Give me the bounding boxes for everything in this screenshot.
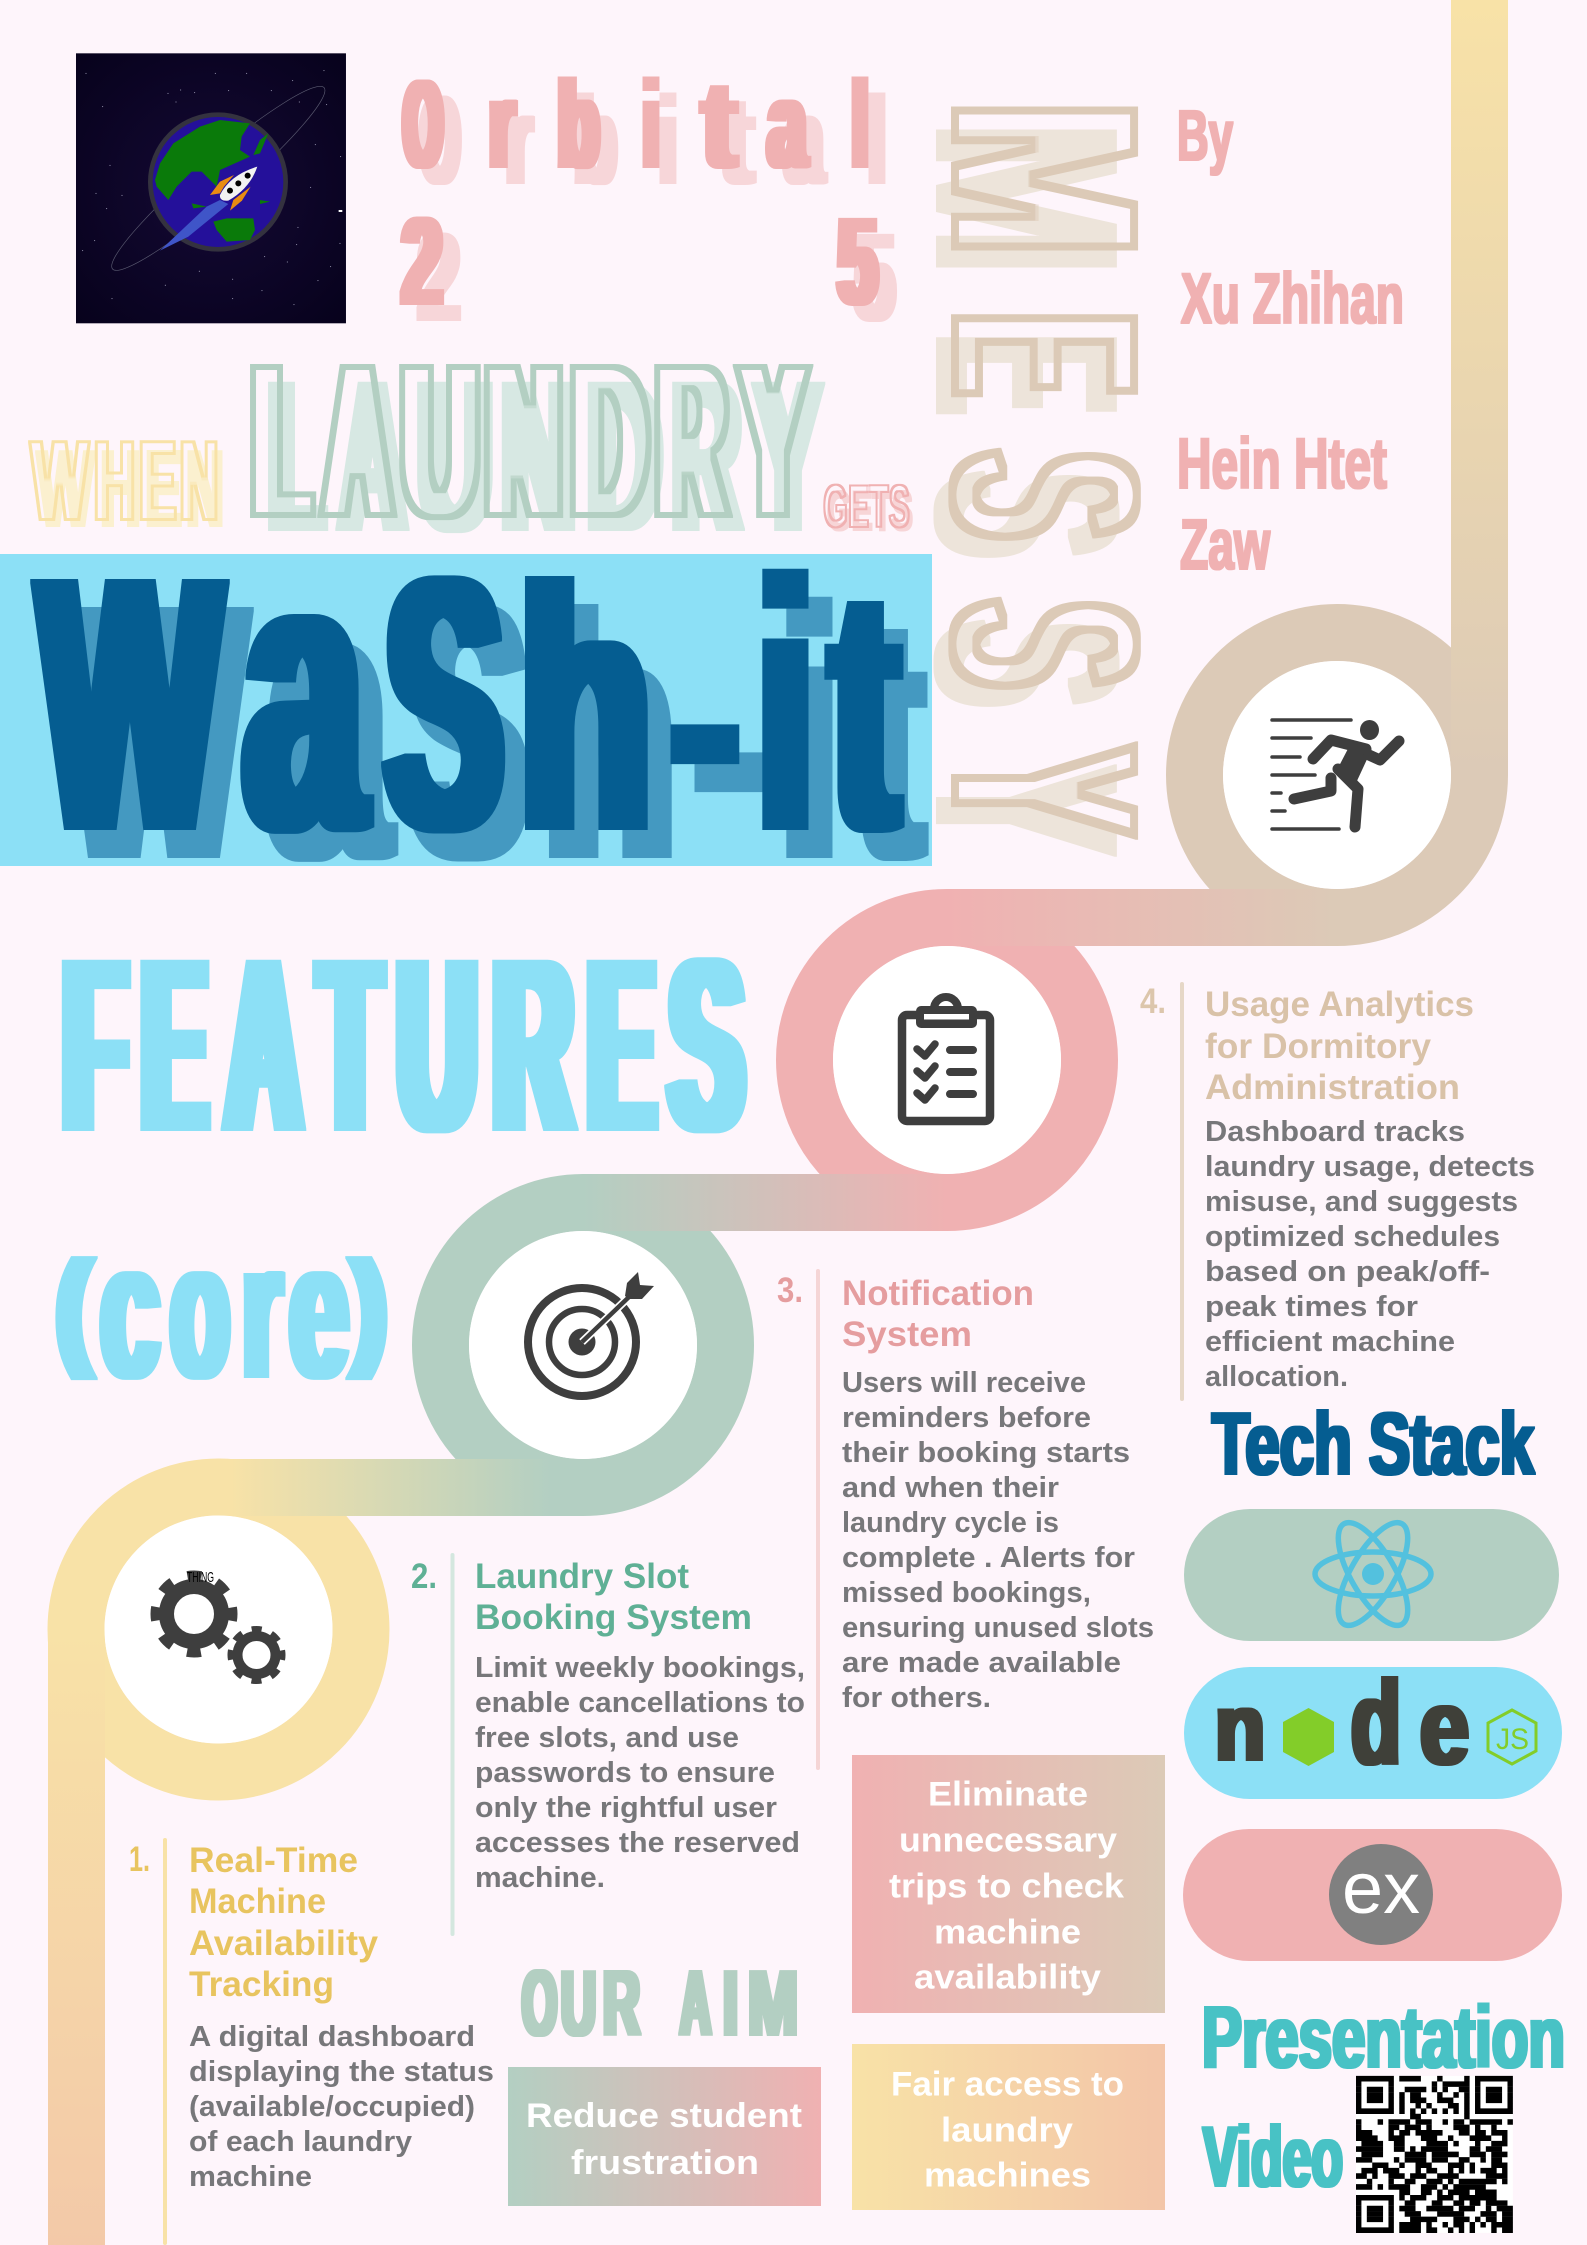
heading: GETS: GETS — [823, 473, 910, 540]
QR code — [1356, 2076, 1513, 2233]
tech pill: React — [1184, 1509, 1559, 1641]
feature 2: laundry slot booking system: Laundry Slot — [475, 1557, 689, 1596]
heading: FEATURES: E — [143, 908, 206, 1183]
heading: Orbital 25: a — [768, 57, 807, 194]
heading: Orbital 25: O — [404, 57, 442, 194]
vertical heading: MESSY: S — [894, 451, 1195, 539]
heading: (core): e — [290, 1201, 348, 1419]
feature 2: laundry slot booking system: accesses the reserved — [475, 1827, 800, 1859]
icon: gears — [155, 1569, 282, 1681]
heading: Orbital 25: l — [853, 57, 867, 194]
vertical heading: MESSY: S — [881, 620, 1171, 708]
icon: target with arrow — [528, 1272, 654, 1396]
feature 2: laundry slot booking system: passwords to ensure — [475, 1757, 775, 1789]
vertical heading: MESSY: M — [894, 101, 1195, 256]
heading: Orbital 25: O — [421, 73, 459, 210]
title banner: WaSh-it: a — [268, 500, 388, 940]
heading: WHEN: H — [94, 418, 135, 545]
heading: OUR AIM: O — [522, 1951, 557, 2055]
title banner: WaSh-it: W — [64, 532, 246, 933]
vertical heading: MESSY: M — [881, 121, 1171, 276]
heading: LAUNDRY: L — [254, 317, 309, 564]
vertical heading: MESSY: S — [894, 600, 1195, 688]
feature 3: notification system — [777, 1269, 1154, 1770]
heading: Orbital 25: r — [490, 57, 514, 194]
title banner: WaSh-it: i — [759, 508, 812, 904]
feature 3: notification system: for others. — [842, 1682, 991, 1714]
vertical heading: MESSY — [881, 101, 1195, 855]
tech pill: Express — [1183, 1829, 1562, 1961]
title banner: WaSh-it — [0, 472, 932, 940]
heading: GETS: GETS — [827, 479, 913, 542]
vertical heading: MESSY: Y — [881, 766, 1171, 855]
heading: (core): c — [101, 1201, 159, 1419]
authors: Zaw — [1180, 506, 1270, 585]
title banner: WaSh-it: - — [673, 550, 737, 886]
feature 2: laundry slot booking system: 2. — [411, 1557, 437, 1596]
heading: LAUNDRY — [254, 317, 820, 576]
heading: LAUNDRY: R — [658, 317, 725, 564]
aim card: eliminate unnecessary trips: Eliminate — [928, 1776, 1088, 1814]
aim card: eliminate unnecessary trips: trips to check — [889, 1868, 1124, 1906]
vertical heading: MESSY: Y — [894, 746, 1195, 835]
aim card: eliminate unnecessary trips: unnecessary — [899, 1822, 1117, 1860]
title banner: WaSh-it: S — [386, 504, 502, 905]
heading: Orbital 25: i — [644, 57, 658, 194]
heading: OUR AIM: U — [561, 1951, 596, 2055]
feature 2: laundry slot booking system: enable cancellations to — [475, 1687, 805, 1719]
title banner: WaSh-it: W — [40, 504, 222, 905]
feature 3: notification system: and when their — [842, 1472, 1059, 1504]
tech pill: Express: ex — [1342, 1849, 1420, 1929]
heading: LAUNDRY: A — [340, 337, 405, 576]
heading: FEATURES: T — [320, 908, 380, 1183]
tech pill: Node.js: JS — [1496, 1723, 1529, 1756]
authors: Hein Htet — [1177, 425, 1387, 504]
aim card: eliminate unnecessary trips: availability — [914, 1958, 1101, 1996]
feature 1: real-time machine availability tracking: Machine — [189, 1882, 326, 1921]
heading: Orbital 25: b — [575, 73, 616, 210]
feature 4: usage analytics for dormitory administration: based on peak/off- — [1205, 1256, 1490, 1288]
aim card: reduce student frustration: Reduce student — [526, 2097, 802, 2135]
heading: LAUNDRY: N — [487, 317, 560, 564]
heading: (core): ( — [56, 1233, 92, 1380]
heading: WHEN: N — [180, 418, 218, 545]
feature 4: usage analytics for dormitory administration: for Dormitory — [1205, 1027, 1432, 1066]
heading: FEATURES: A — [227, 908, 300, 1183]
heading: Orbital 25: t — [719, 73, 753, 210]
icon: clipboard checklist — [902, 997, 990, 1121]
tech pill: Node.js: d — [1351, 1656, 1401, 1790]
tech pill: Node.js: e — [1420, 1666, 1469, 1787]
title banner: WaSh-it: - — [697, 578, 761, 914]
heading: LAUNDRY: U — [418, 337, 492, 576]
heading: Orbital 25: a — [785, 73, 824, 210]
heading: (core): ) — [351, 1233, 387, 1380]
heading: WHEN — [31, 418, 224, 550]
heading: Presentation Video — [1202, 1989, 1565, 2205]
heading: GETS — [823, 473, 913, 542]
heading: WHEN: H — [100, 428, 141, 550]
heading: Orbital 25: i — [661, 73, 675, 210]
feature 1: real-time machine availability tracking: displaying the status — [189, 2056, 494, 2088]
vertical heading: MESSY: E — [894, 313, 1195, 395]
text: N — [186, 428, 224, 550]
feature 1: real-time machine availability tracking: (available/occupied) — [189, 2091, 475, 2123]
heading: WHEN: W — [31, 418, 88, 545]
heading: OUR AIM — [522, 1951, 798, 2055]
text: Y — [756, 337, 820, 576]
heading: Orbital 25: b — [558, 57, 599, 194]
feature 3: notification system: Users will receive — [842, 1367, 1086, 1399]
authors — [1177, 97, 1404, 585]
heading: WHEN: E — [145, 428, 182, 550]
aim card: reduce student frustration: frustration — [571, 2144, 759, 2182]
heading: Orbital 25: 2 — [419, 210, 459, 347]
feature 1: real-time machine availability tracking: of each laundry — [189, 2126, 412, 2158]
heading: LAUNDRY: U — [403, 317, 477, 564]
title banner: WaSh-it: i — [783, 536, 836, 932]
heading: WHEN: W — [37, 428, 94, 550]
authors: Xu Zhihan — [1181, 260, 1404, 339]
heading: Orbital 25: 2 — [402, 194, 442, 331]
feature 2: laundry slot booking system: Limit weekly bookings, — [475, 1652, 805, 1684]
title banner: WaSh-it: h — [520, 517, 651, 902]
heading: OUR AIM: A — [680, 1951, 711, 2055]
feature 2: laundry slot booking system: Booking System — [475, 1598, 752, 1637]
icon: running person — [1272, 720, 1399, 829]
title banner: WaSh-it: t — [856, 545, 921, 930]
feature 1: real-time machine availability tracking: 1. — [129, 1840, 150, 1879]
feature 4: usage analytics for dormitory administration: optimized schedules — [1205, 1221, 1500, 1253]
feature 3: notification system: are made available — [842, 1647, 1121, 1679]
feature 1: real-time machine availability tracking — [129, 1838, 494, 2245]
heading: FEATURES: U — [398, 908, 476, 1183]
logo: rocket orbiting planet — [76, 53, 346, 323]
feature 4: usage analytics for dormitory administration: allocation. — [1205, 1361, 1348, 1393]
heading: OUR AIM: M — [748, 1951, 798, 2055]
feature 3: notification system: missed bookings, — [842, 1577, 1091, 1609]
feature 3: notification system: Notification — [842, 1274, 1034, 1313]
authors: By — [1177, 97, 1233, 176]
heading: Orbital 25 — [402, 57, 894, 347]
heading: Orbital 25: t — [702, 57, 736, 194]
heading: FEATURES: R — [494, 908, 572, 1183]
vertical heading: MESSY: E — [881, 333, 1171, 415]
heading: LAUNDRY: Y — [741, 317, 805, 564]
feature 4: usage analytics for dormitory administration: peak times for — [1205, 1291, 1418, 1323]
heading: OUR AIM: I — [723, 1951, 738, 2055]
feature 3: notification system: ensuring unused slots — [842, 1612, 1154, 1644]
heading: Orbital 25: 5 — [838, 194, 877, 331]
aim card: eliminate unnecessary trips — [852, 1755, 1165, 2013]
title banner: WaSh-it: a — [244, 472, 364, 912]
heading: FEATURES: E — [589, 908, 654, 1183]
heading: (core): r — [243, 1201, 281, 1419]
feature 4: usage analytics for dormitory administration: Administration — [1205, 1068, 1460, 1107]
aim card: eliminate unnecessary trips: machine — [934, 1914, 1081, 1952]
feature 1: real-time machine availability tracking: Tracking — [189, 1965, 334, 2004]
aim card: fair access to laundry machines: Fair access to — [891, 2066, 1124, 2104]
title banner: WaSh-it: h — [544, 545, 675, 930]
feature 1: real-time machine availability tracking: machine — [189, 2161, 312, 2193]
feature 4: usage analytics for dormitory administration: Usage Analytics — [1205, 985, 1474, 1024]
feature 2: laundry slot booking system: only the rightful user — [475, 1792, 777, 1824]
feature 1: real-time machine availability tracking: Availability — [189, 1924, 379, 1963]
feature 2: laundry slot booking system — [411, 1553, 805, 1936]
heading: (core): o — [171, 1201, 229, 1419]
heading: WHEN: E — [139, 418, 176, 545]
feature 2: laundry slot booking system: machine. — [475, 1862, 605, 1894]
heading: LAUNDRY: D — [588, 337, 661, 576]
heading: LAUNDRY: N — [502, 337, 575, 576]
heading: LAUNDRY: L — [269, 337, 324, 576]
tech pill: Node.js — [1184, 1656, 1562, 1799]
heading: OUR AIM: R — [603, 1951, 640, 2055]
feature 3: notification system: reminders before — [842, 1402, 1091, 1434]
heading: Orbital 25: l — [870, 73, 884, 210]
text: S — [670, 908, 743, 1183]
heading: FEATURES — [64, 908, 743, 1183]
tech pill: Node.js: n — [1215, 1674, 1265, 1781]
heading: Presentation Video: Video — [1203, 2110, 1343, 2205]
feature 2: laundry slot booking system: free slots, and use — [475, 1722, 739, 1754]
feature 3: notification system: their booking starts — [842, 1437, 1130, 1469]
feature 3: notification system: 3. — [777, 1271, 803, 1310]
heading: LAUNDRY: D — [573, 317, 646, 564]
heading: Orbital 25: r — [507, 73, 531, 210]
aim card: reduce student frustration — [508, 2067, 821, 2206]
heading: LAUNDRY: A — [325, 317, 390, 564]
heading: FEATURES: F — [64, 908, 126, 1183]
aim card: fair access to laundry machines: laundry — [941, 2112, 1073, 2150]
feature 1: real-time machine availability tracking: A digital dashboard — [189, 2021, 475, 2053]
feature 4: usage analytics for dormitory administration: laundry usage, detects — [1205, 1151, 1535, 1183]
feature 4: usage analytics for dormitory administration: Dashboard tracks — [1205, 1116, 1465, 1148]
title banner: WaSh-it: S — [410, 532, 526, 933]
heading: (core) — [56, 1201, 387, 1419]
feature 1: real-time machine availability tracking: Real-Time — [189, 1841, 358, 1880]
feature 3: notification system: System — [842, 1315, 972, 1354]
feature 3: notification system: complete . Alerts for — [842, 1542, 1135, 1574]
feature 4: usage analytics for dormitory administration: 4. — [1140, 982, 1166, 1021]
feature 4: usage analytics for dormitory administration: misuse, and suggests — [1205, 1186, 1518, 1218]
feature 4: usage analytics for dormitory administration — [1140, 982, 1535, 1401]
feature 3: notification system: laundry cycle is — [842, 1507, 1059, 1539]
vertical heading: MESSY: S — [881, 471, 1171, 559]
feature 4: usage analytics for dormitory administration: efficient machine — [1205, 1326, 1455, 1358]
title banner: WaSh-it: t — [832, 517, 897, 902]
aim card: fair access to laundry machines — [852, 2044, 1165, 2210]
heading: LAUNDRY: R — [673, 337, 740, 576]
aim card: fair access to laundry machines: machines — [924, 2156, 1091, 2194]
heading: Orbital 25: 5 — [855, 210, 894, 347]
icon: gears: THING — [187, 1569, 214, 1586]
